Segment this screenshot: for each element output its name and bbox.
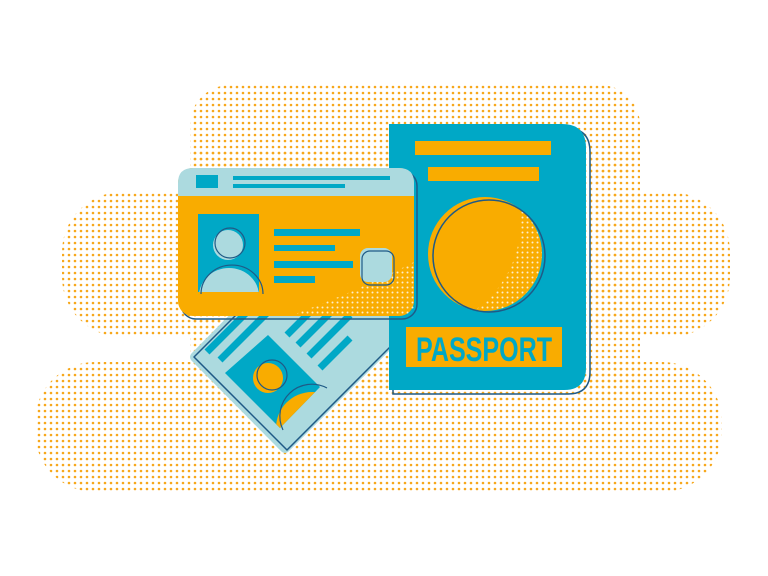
title bars bbox=[415, 141, 551, 155]
dotted highlight bbox=[290, 262, 414, 316]
passport bbox=[389, 124, 590, 394]
front ID card bbox=[178, 168, 417, 324]
globe circle bbox=[428, 197, 542, 311]
stripes bbox=[207, 302, 350, 368]
text lines bbox=[274, 229, 360, 236]
illustration: ID cards and passport bbox=[38, 86, 730, 490]
PASSPORT label bbox=[406, 327, 562, 367]
photo bbox=[198, 214, 264, 294]
chip bbox=[360, 248, 392, 282]
dotted background blob bbox=[35, 85, 730, 492]
passport: PASSPORT bbox=[416, 331, 552, 369]
back ID card bbox=[190, 316, 389, 453]
photo with orange person bbox=[225, 335, 328, 430]
